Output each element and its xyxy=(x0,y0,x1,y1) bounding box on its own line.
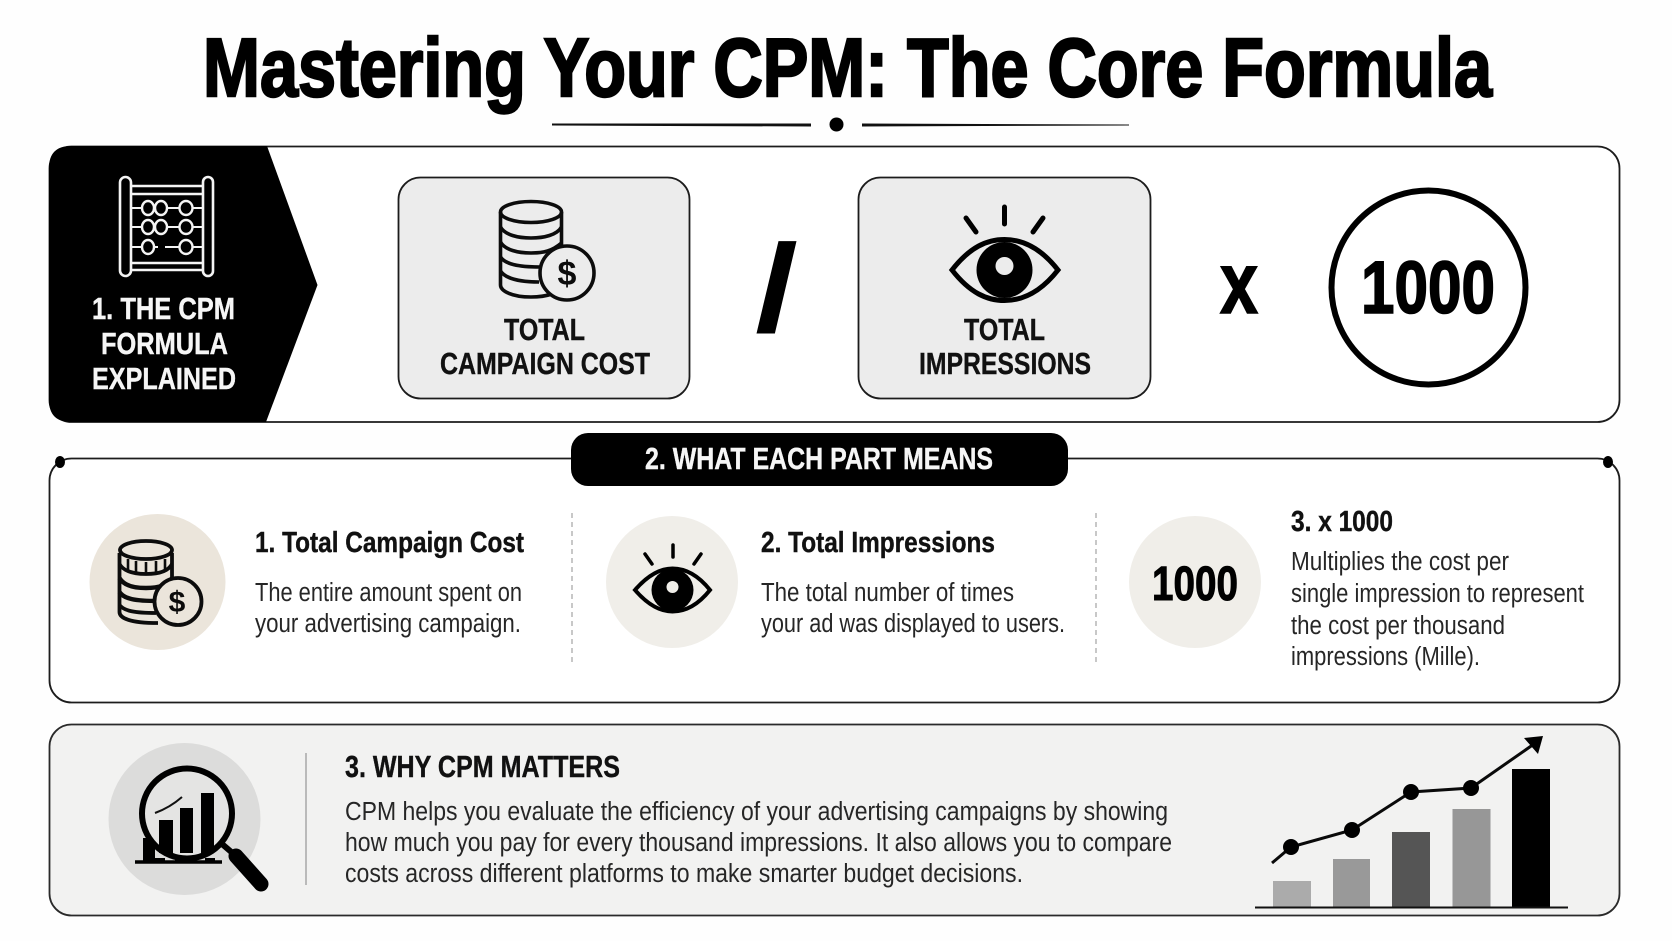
item: x 1000 xyxy=(1129,506,1584,671)
card label: TOTAL xyxy=(964,313,1045,347)
card label: CAMPAIGN COST xyxy=(440,347,650,381)
circle: 1000: 1000 xyxy=(1361,246,1495,329)
card: total impressions xyxy=(858,178,1150,398)
operator: divide: / xyxy=(755,220,798,358)
item heading: 2. Total Impressions xyxy=(761,527,995,559)
item description: The entire amount spent on xyxy=(255,579,522,607)
panel: why CPM matters xyxy=(50,724,1620,916)
circle: 1000 xyxy=(1332,190,1526,384)
panel: what each part means xyxy=(50,433,1620,702)
section 2 heading pill: 2. WHAT EACH PART MEANS xyxy=(645,442,993,476)
icon: coin stack xyxy=(500,202,594,300)
title underline with dot xyxy=(552,118,1129,132)
item heading: 3. x 1000 xyxy=(1291,506,1393,538)
item: total impressions xyxy=(606,516,1065,648)
icon: eye xyxy=(952,207,1058,300)
icon: coin stack on beige circle: $ xyxy=(169,586,186,619)
icon: coin stack: $ xyxy=(558,255,577,293)
section 2 heading pill xyxy=(571,433,1068,486)
icon: 1000 on beige circle xyxy=(1129,516,1261,648)
card label: TOTAL xyxy=(504,313,585,347)
section 3 body text: CPM helps you evaluate the efficiency of your advertising campaigns by showing xyxy=(345,798,1168,826)
panel: the CPM formula xyxy=(49,146,1620,422)
section 3 heading: 3. WHY CPM MATTERS xyxy=(345,750,620,784)
operator: multiply: x xyxy=(1220,235,1258,332)
item description: The total number of times xyxy=(761,579,1014,607)
banner label: FORMULA xyxy=(101,327,228,361)
icon: abacus xyxy=(120,177,213,276)
item description: impressions (Mille). xyxy=(1291,643,1480,671)
banner label: EXPLAINED xyxy=(92,362,236,396)
item description: single impression to represent xyxy=(1291,580,1584,608)
item description xyxy=(1291,548,1584,671)
card: total campaign cost xyxy=(398,178,690,398)
banner label xyxy=(92,292,236,396)
section 1 arrow banner xyxy=(49,146,318,422)
item: total campaign cost xyxy=(90,514,524,650)
icon: magnifier over bar chart xyxy=(108,743,261,895)
section 3 body text xyxy=(345,798,1172,888)
item description xyxy=(255,579,522,638)
card label xyxy=(440,313,650,381)
item description: your advertising campaign. xyxy=(255,610,521,638)
item heading: 1. Total Campaign Cost xyxy=(255,527,524,559)
banner label: 1. THE CPM xyxy=(92,292,235,326)
section 3 body text: costs across different platforms to make smarter budget decisions. xyxy=(345,860,1023,888)
item description: Multiplies the cost per xyxy=(1291,548,1509,576)
icon: eye on beige circle xyxy=(606,516,738,648)
icon: 1000 on beige circle: 1000 xyxy=(1152,558,1238,611)
card label: IMPRESSIONS xyxy=(919,347,1091,381)
item description xyxy=(761,579,1065,638)
bar chart with rising trend arrow xyxy=(1255,736,1568,908)
section 3 body text: how much you pay for every thousand impressions. It also allows you to compare xyxy=(345,829,1172,857)
item description: your ad was displayed to users. xyxy=(761,610,1065,638)
icon: coin stack on beige circle xyxy=(90,514,226,650)
item description: the cost per thousand xyxy=(1291,612,1505,640)
card label xyxy=(919,313,1091,381)
